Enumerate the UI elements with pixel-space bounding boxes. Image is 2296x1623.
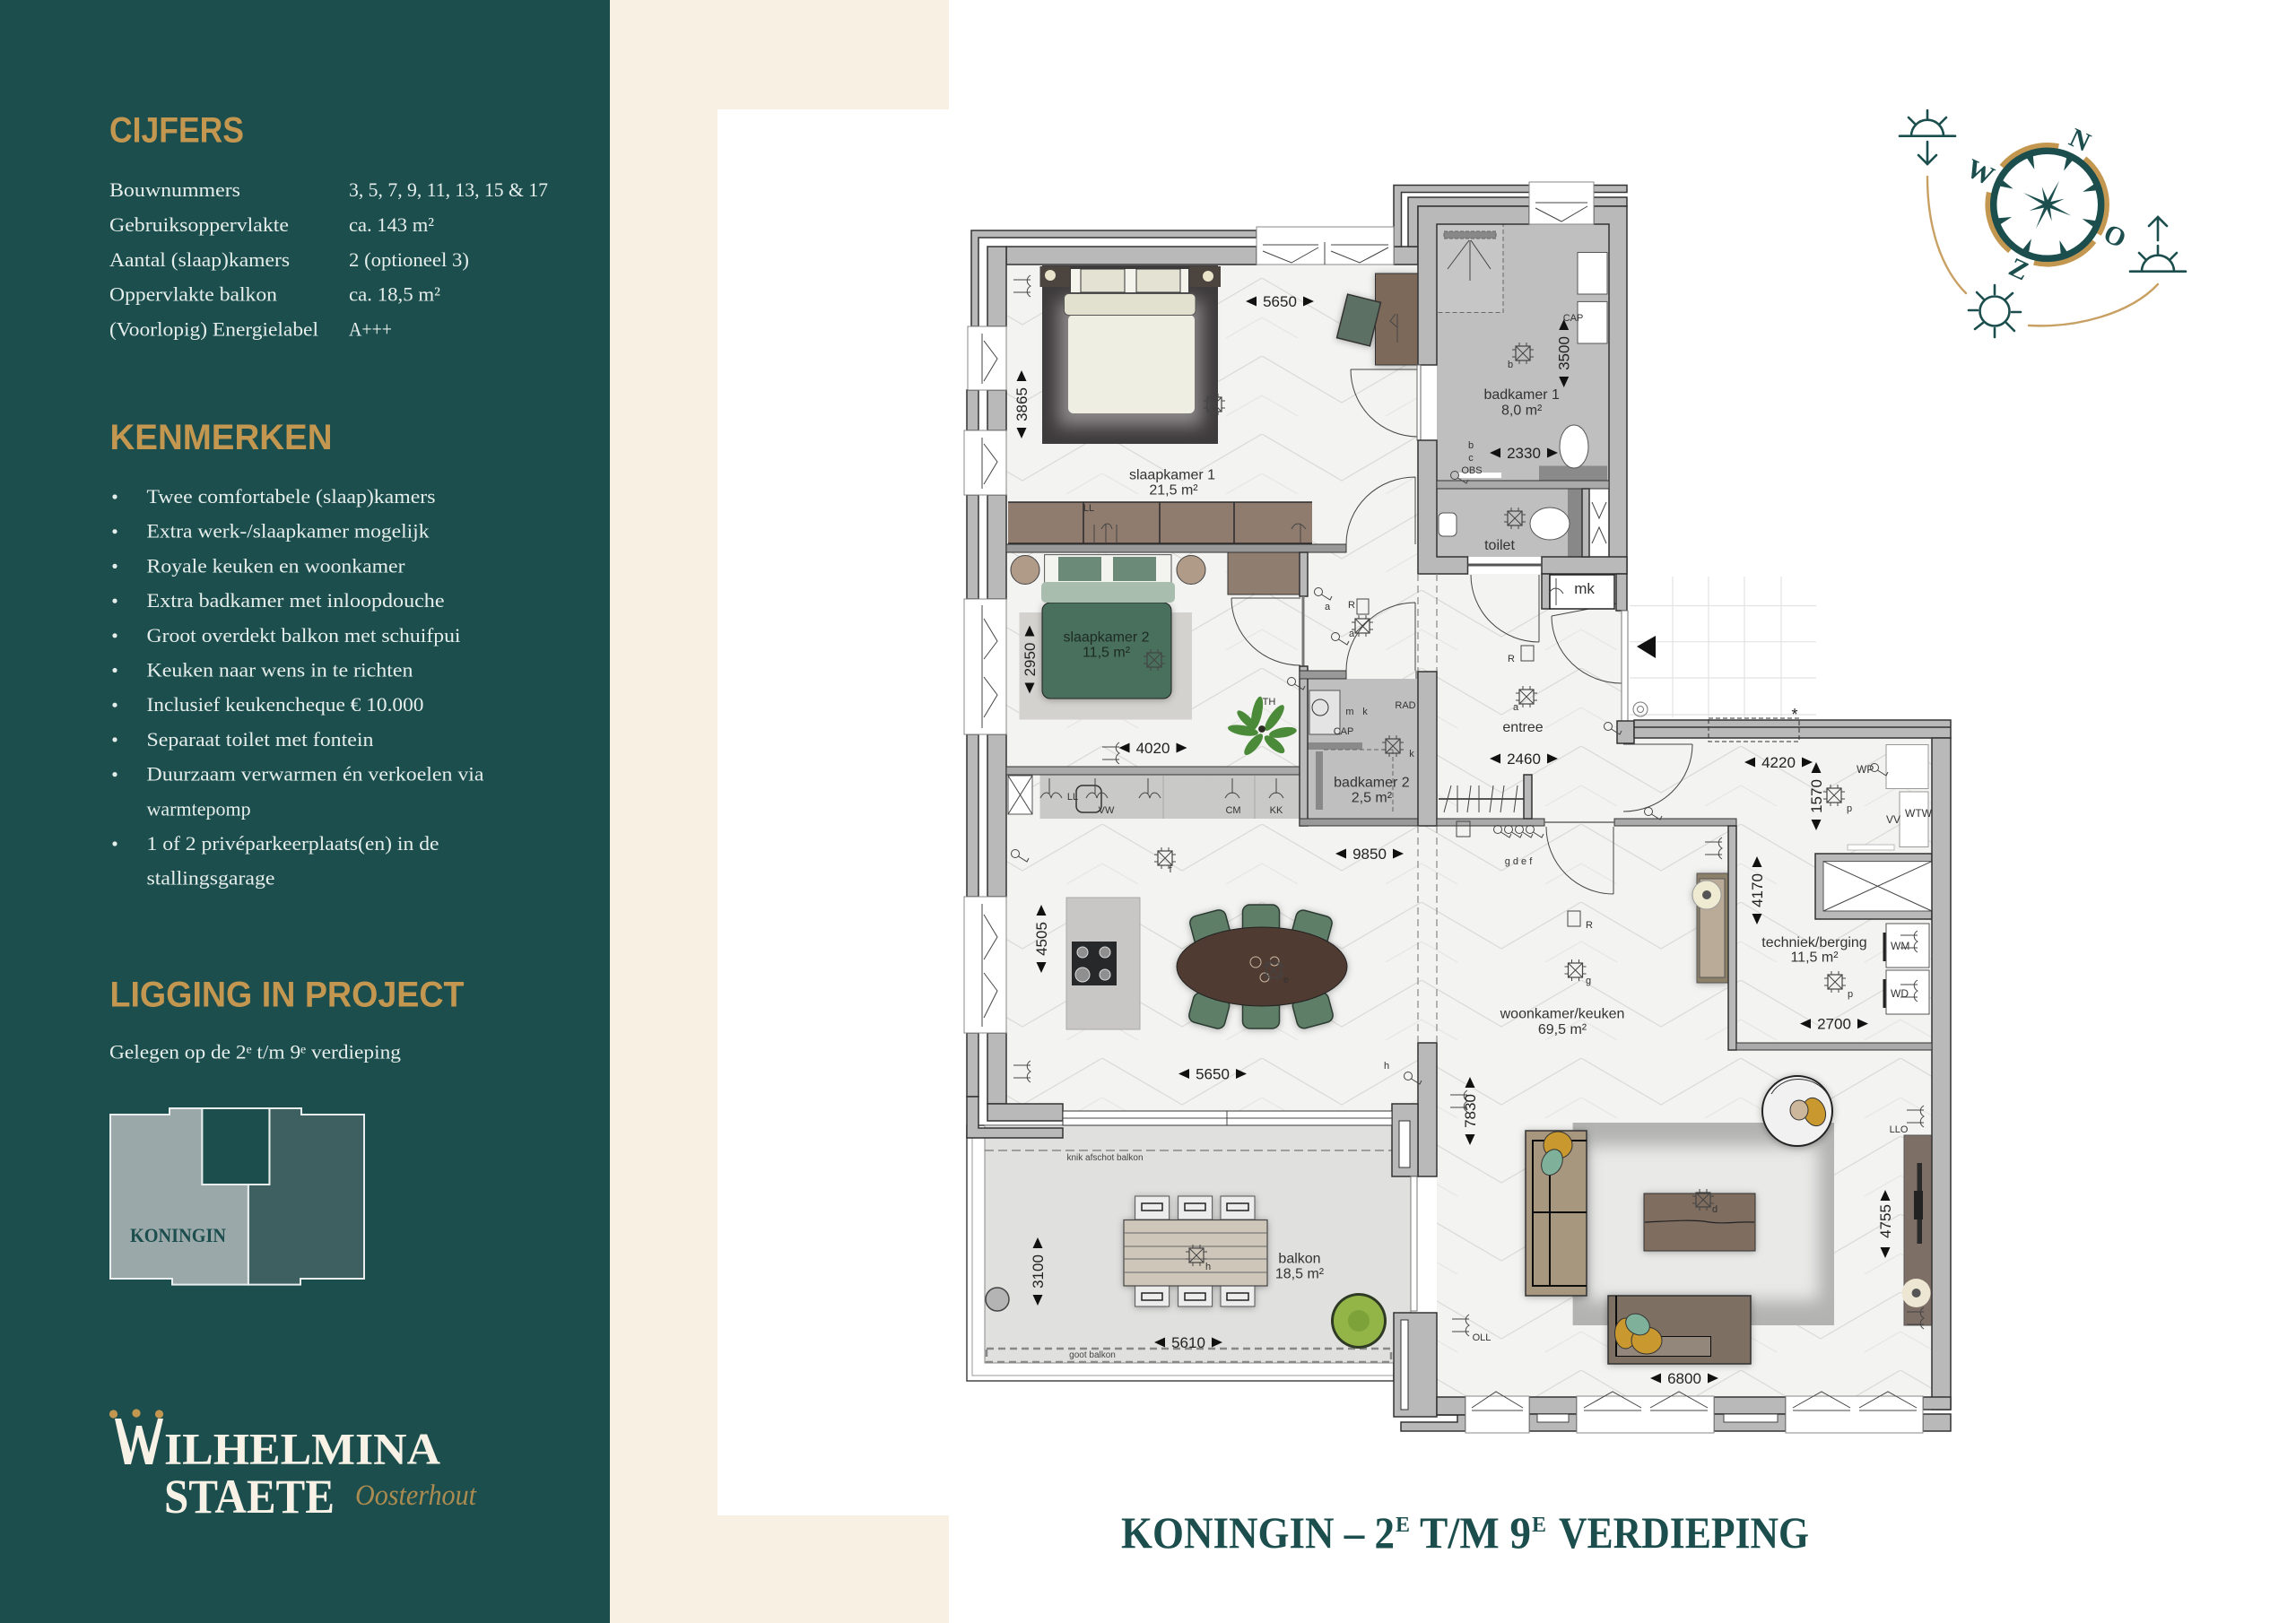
furniture: balkon table and chairs (1124, 1196, 1267, 1306)
list: kenmerken (112, 485, 484, 890)
list: kenmerken: 1 of 2 privéparkeerplaats(en) in de (147, 832, 439, 855)
terrace grid (1630, 577, 1816, 717)
furniture: kast slaapkamer 2 (1228, 552, 1300, 595)
small symbols and codes: RAD (1395, 700, 1416, 711)
table: cijfers: 3, 5, 7, 9, 11, 13, 15 & 17 (349, 178, 548, 201)
furniture: keuken counter: VW (1099, 805, 1115, 816)
small symbols and codes: OLL (1473, 1332, 1491, 1343)
furniture: keuken counter: KK (1270, 805, 1283, 816)
windows (964, 182, 1923, 1433)
floor plan (964, 182, 1951, 1433)
compass letters: Z (2005, 252, 2033, 287)
dimensions: 2460 (1507, 751, 1541, 768)
small symbols and codes: f (1169, 864, 1172, 875)
room: balkon: goot balkon (1069, 1350, 1116, 1360)
room labels: badkamer 1 (1483, 387, 1560, 403)
dimensions: 3865 (1013, 387, 1031, 421)
furniture: salontafel (1644, 1193, 1755, 1251)
room: badkamer 2 (1308, 679, 1418, 819)
panel: left sidebar (0, 0, 610, 1623)
small symbols and codes (1067, 313, 1909, 1343)
icon: sun path arcs (1927, 177, 2158, 325)
furniture: fauteuil (1762, 1076, 1832, 1146)
key plan: KONINGIN (130, 1224, 226, 1246)
entrance marker (1637, 636, 1656, 658)
list: kenmerken: Separaat toilet met fontein (147, 728, 373, 751)
room labels: toilet (1484, 538, 1515, 553)
small symbols and codes: b (1508, 360, 1513, 370)
logo: wilhelmina staete: STAETE (164, 1470, 335, 1523)
list: kenmerken: Duurzaam verwarmen én verkoelen via (147, 763, 484, 785)
dimensions: 7830 (1462, 1094, 1479, 1128)
table: cijfers: Bouwnummers (109, 178, 240, 201)
small symbols and codes: k (1362, 707, 1368, 717)
title: koningin: VERDIEPING (1559, 1507, 1809, 1558)
small symbols and codes: R (1508, 654, 1515, 664)
logo: wilhelmina staete (109, 1409, 477, 1523)
furniture: dressoir techniekwand (1692, 873, 1728, 983)
furniture: vloerkleed woonkamer (1573, 1123, 1834, 1325)
page background: white sheet (718, 109, 2296, 1515)
column: balkon (986, 1288, 1009, 1311)
small symbols and codes: LLO (1890, 1124, 1909, 1135)
dimensions: 2330 (1507, 445, 1541, 462)
table: cijfers (109, 178, 548, 341)
walls (967, 185, 1951, 1431)
dimensions: 4170 (1749, 873, 1766, 907)
room labels: entree (1502, 720, 1544, 735)
logo: wilhelmina staete: Oosterhout (355, 1480, 477, 1512)
title: koningin (1121, 1507, 1809, 1558)
dimensions: 1570 (1808, 779, 1825, 813)
furniture: bed slaapkamer 2 (1011, 555, 1205, 719)
room: toilet (1437, 489, 1609, 557)
door swings (1231, 369, 1692, 894)
dimensions: 3500 (1556, 336, 1573, 370)
room labels: slaapkamer 2 (1063, 629, 1150, 645)
compass letters: O (2099, 219, 2131, 254)
small symbols and codes: g d e f (1505, 856, 1533, 867)
icon: compass rose (1988, 145, 2107, 264)
room: badkamer 1 (1437, 224, 1609, 481)
asterisk: * (1791, 706, 1798, 724)
techniek: apparaten: WD (1891, 987, 1909, 1000)
logo: wilhelmina staete: ILHELMINA (164, 1424, 440, 1474)
furniture: tv meubel (1902, 1135, 1932, 1325)
compass (1900, 110, 2186, 337)
room: balkon (967, 1125, 1411, 1381)
room labels: techniek/berging (1761, 935, 1867, 950)
room labels: slaapkamer 1 (1129, 468, 1215, 483)
small symbols and codes: R (1586, 920, 1593, 931)
techniek: apparaten: VV (1886, 813, 1900, 826)
table: cijfers: (Voorlopig) Energielabel (109, 317, 318, 341)
furniture: kookeiland (1066, 898, 1140, 1029)
furniture: bed slaapkamer 1 (1040, 265, 1221, 444)
small symbols and codes: k (1409, 749, 1414, 759)
small symbols and codes: h (1384, 1061, 1389, 1072)
title: koningin: E (1532, 1514, 1546, 1537)
furniture: bureau slaapkamer 1 (1337, 273, 1418, 365)
list: kenmerken: Royale keuken en woonkamer (147, 554, 405, 577)
room: balkon: knik afschot balkon (1066, 1153, 1144, 1163)
icon: sun (1969, 285, 2021, 337)
list: kenmerken: stallingsgarage (147, 867, 274, 890)
dimensions: 2950 (1022, 643, 1039, 676)
room labels: woonkamer/keuken (1500, 1006, 1624, 1022)
small symbols and codes: h (1205, 1262, 1211, 1272)
room labels: 11,5 m² (1790, 950, 1839, 966)
dimensions: 4020 (1136, 740, 1170, 757)
list: kenmerken: Extra badkamer met inloopdouche (147, 589, 445, 612)
key plan (110, 1108, 364, 1285)
techniek: schacht (1815, 854, 1932, 919)
small symbols and codes: CAP (1563, 313, 1583, 324)
room labels: 11,5 m² (1083, 645, 1131, 660)
table: cijfers: ca. 18,5 m² (349, 283, 440, 305)
list: kenmerken: warmtepomp (147, 797, 251, 820)
small symbols and codes: R (1348, 600, 1355, 611)
dimensions: 6800 (1667, 1370, 1701, 1387)
furniture: bank onder (1608, 1296, 1751, 1364)
dimensions: 4220 (1761, 754, 1796, 771)
table: cijfers: A+++ (349, 317, 392, 341)
page background: cream band (610, 0, 949, 1623)
page background: white right area (949, 0, 2296, 1623)
room labels: 21,5 m² (1149, 483, 1198, 499)
icon: sunrise (2130, 217, 2186, 272)
dimensions (1013, 293, 1894, 1387)
small symbols and codes: TH (1263, 697, 1275, 707)
room labels: badkamer 2 (1334, 775, 1410, 790)
room labels: balkon (1278, 1252, 1321, 1267)
mk label: mk (1574, 580, 1595, 597)
techniek: apparaten (1848, 744, 1933, 1014)
list: kenmerken: Keuken naar wens in te richten (147, 658, 413, 681)
title: koningin: KONINGIN – 2 (1121, 1507, 1395, 1558)
compass letters: N (2065, 123, 2095, 158)
small symbols and codes: p (1847, 803, 1852, 814)
furniture: kast slaapkamer 1 (1008, 502, 1312, 544)
ceiling lights (1144, 343, 1846, 1266)
small symbols and codes: p (1848, 989, 1853, 1000)
room labels: 2,5 m² (1352, 790, 1393, 805)
heading: kenmerken: KENMERKEN (109, 418, 332, 457)
small symbols and codes: m (1345, 707, 1354, 717)
dimensions: 9850 (1352, 846, 1387, 863)
small symbols and codes: a (1349, 629, 1355, 639)
room labels: 18,5 m² (1275, 1267, 1325, 1282)
list: kenmerken: Extra werk-/slaapkamer mogelijk (147, 520, 429, 542)
table: cijfers: 2 (optioneel 3) (349, 248, 469, 271)
floor: herringbone (1006, 265, 1932, 1399)
techniek: apparaten: WTW (1905, 807, 1933, 820)
heading: cijfers: CIJFERS (109, 111, 244, 151)
entrance ring (1633, 702, 1648, 716)
small symbols and codes: b (1468, 440, 1474, 451)
compass letters (1961, 123, 2131, 287)
text: ligging: Gelegen op de 2ᵉ t/m 9ᵉ verdieping (109, 1040, 401, 1063)
table: cijfers: Gebruiksoppervlakte (109, 213, 289, 236)
list: kenmerken: Inclusief keukencheque € 10.000 (147, 693, 423, 716)
room labels: 8,0 m² (1501, 403, 1543, 418)
table: cijfers: ca. 143 m² (349, 213, 434, 236)
table: cijfers: Aantal (slaap)kamers (109, 248, 290, 271)
small symbols and codes: c (1468, 453, 1474, 464)
table: cijfers: Oppervlakte balkon (109, 283, 277, 305)
small symbols and codes: LL (1083, 503, 1094, 514)
dimensions: 3100 (1030, 1254, 1047, 1289)
garderobe (1439, 785, 1524, 812)
dimensions: 2700 (1817, 1016, 1851, 1033)
compass letters: W (1961, 153, 1999, 192)
sockets and switches (1012, 275, 1924, 1336)
small symbols and codes: LL (1067, 792, 1078, 803)
heading: ligging in project: LIGGING IN PROJECT (109, 976, 465, 1015)
furniture: keuken counter (1008, 776, 1300, 819)
furniture: bank links (1526, 1131, 1587, 1296)
list: kenmerken: Twee comfortabele (slaap)kamers (147, 485, 436, 508)
icon: sunset (1900, 110, 1955, 164)
title: koningin: T/M 9 (1420, 1507, 1531, 1558)
list: kenmerken: Groot overdekt balkon met schuifpui (147, 624, 461, 647)
room labels (1063, 387, 1867, 1282)
dimensions: 4505 (1033, 922, 1050, 956)
plant: slaapkamer 2 (1227, 696, 1298, 758)
dimensions: 5650 (1263, 293, 1297, 310)
title: koningin: E (1396, 1514, 1410, 1537)
small symbols and codes: OBS (1461, 465, 1483, 476)
small symbols and codes: d (1712, 1204, 1718, 1215)
dimensions: 5650 (1196, 1065, 1230, 1083)
small symbols and codes: a (1325, 602, 1331, 612)
techniek: apparaten: WM (1891, 940, 1909, 952)
small symbols and codes: a (1513, 702, 1519, 713)
furniture: eettafel (1177, 905, 1347, 1030)
dimensions: 5610 (1171, 1334, 1205, 1351)
dimensions: 4755 (1877, 1204, 1894, 1238)
small symbols and codes: g (1586, 976, 1591, 986)
techniek: apparaten: WP (1857, 763, 1874, 776)
room labels: 69,5 m² (1538, 1022, 1587, 1037)
small symbols and codes: CAP (1334, 726, 1353, 737)
furniture: keuken counter: CM (1225, 805, 1241, 816)
plant: balkon (1331, 1293, 1387, 1349)
small symbols and codes: e (1283, 975, 1289, 985)
